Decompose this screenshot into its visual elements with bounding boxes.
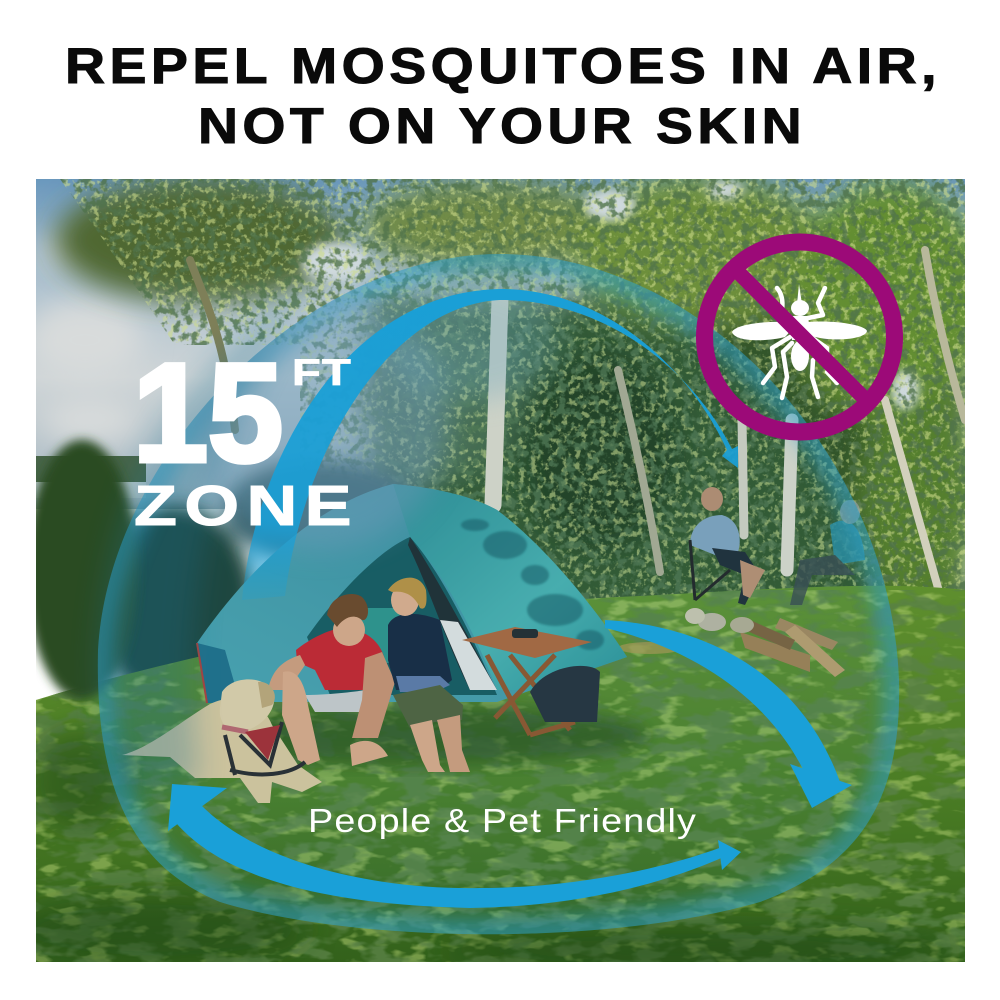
- title: [65, 38, 941, 154]
- firewood and rocks: [685, 608, 845, 677]
- tent: [197, 484, 627, 703]
- photo: campsite scene: [10, 175, 990, 975]
- foliage texture: [36, 179, 965, 629]
- boy in red shirt: [268, 594, 395, 766]
- woman seated: [790, 500, 865, 605]
- arrow: top arc: [242, 289, 738, 600]
- man seated: [690, 487, 765, 605]
- dog: [122, 679, 322, 803]
- no-mosquito icon: [704, 242, 894, 432]
- repeller device: [512, 629, 538, 638]
- left bush: [26, 440, 138, 700]
- arrowhead: right sweep: [790, 764, 852, 808]
- clouds: [27, 238, 143, 442]
- upper left dome haze: [190, 280, 560, 550]
- treeline and lake: [36, 456, 146, 482]
- title: REPEL MOSQUITOES IN AIR,: [65, 38, 941, 94]
- sky: [36, 179, 965, 509]
- arrowhead: bottom left: [168, 784, 227, 831]
- grass shadows: [10, 730, 960, 975]
- backpack: [530, 666, 600, 722]
- tent shade pattern: [461, 519, 604, 650]
- arrow: bottom double: [177, 806, 720, 908]
- boy in navy shirt: [388, 578, 470, 772]
- prohibition ring: [704, 242, 894, 432]
- grass: [36, 586, 965, 962]
- title: NOT ON YOUR SKIN: [198, 98, 806, 154]
- dirt patch: [620, 642, 675, 654]
- dome: 15 ft zone: [98, 254, 899, 934]
- 15 ft zone label: FT: [292, 352, 352, 393]
- 15 ft zone label: ZONE: [134, 474, 359, 538]
- 15 ft zone label: [133, 334, 359, 538]
- birch trunks: [190, 250, 965, 602]
- tent doorway: [307, 537, 497, 695]
- arrowhead: bottom right: [718, 840, 741, 870]
- 15 ft zone label: 15: [133, 334, 283, 491]
- background foliage: [55, 175, 990, 620]
- tent lower left: [198, 643, 234, 703]
- tent shadow on grass: [190, 705, 650, 765]
- sky gaps: [301, 181, 919, 410]
- left dome shade: [98, 300, 300, 800]
- dark woods behind tent: [112, 451, 412, 678]
- arrow: right sweep: [605, 620, 840, 782]
- folding table: [462, 627, 592, 735]
- mosquito: [732, 284, 867, 398]
- caption: People & Pet Friendly: [308, 802, 697, 839]
- dog harness: [225, 722, 305, 775]
